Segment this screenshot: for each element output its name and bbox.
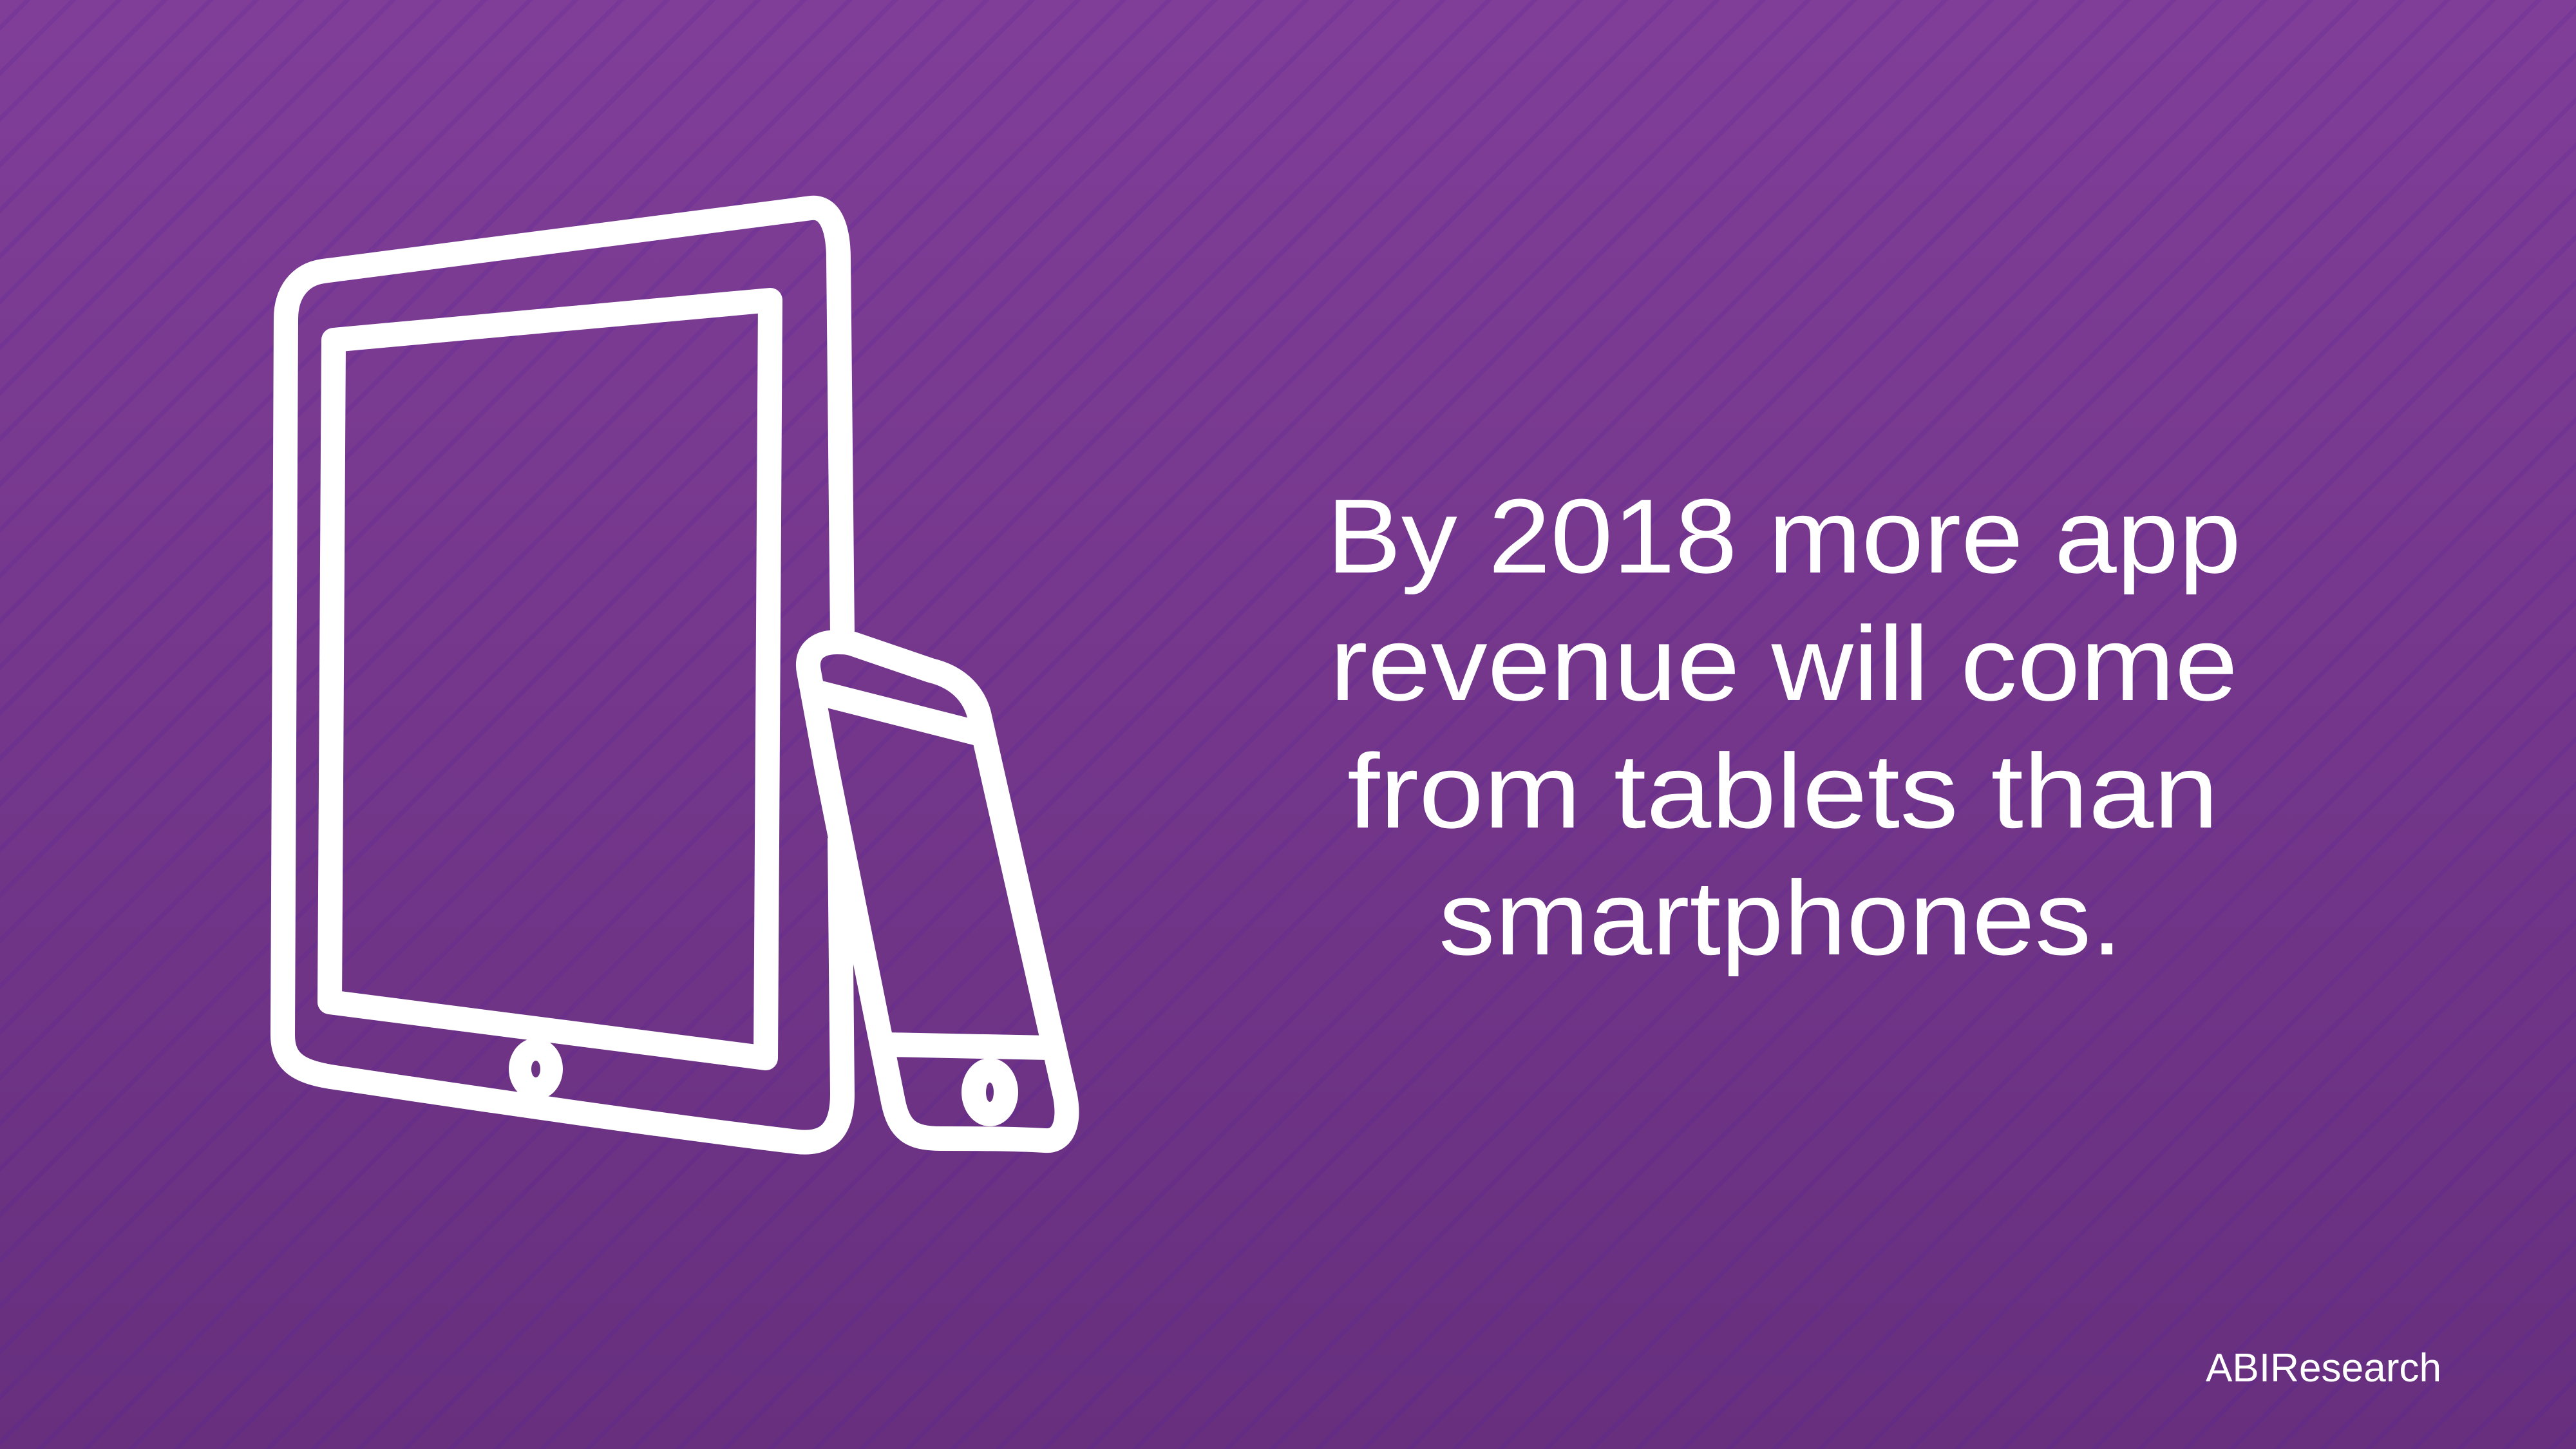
tablet screen [330,300,770,1058]
phone bottom bar [886,1045,1050,1048]
phone home button [961,1058,1018,1126]
icon: smartphone [808,642,1066,1141]
logo: ABIResearch: ABIResearch [2206,1346,2441,1390]
headline text: By 2018 more app [1327,477,2241,595]
tablet home button [509,1038,563,1100]
phone body outline [808,642,1066,1141]
headline text: revenue will come [1330,605,2238,723]
headline text [1327,477,2241,977]
headline text: from tablets than [1347,732,2219,850]
phone top bar [817,692,979,734]
headline text: smartphones. [1439,859,2123,977]
tablet body outline [283,208,842,1142]
icon: tablet [283,208,842,1142]
